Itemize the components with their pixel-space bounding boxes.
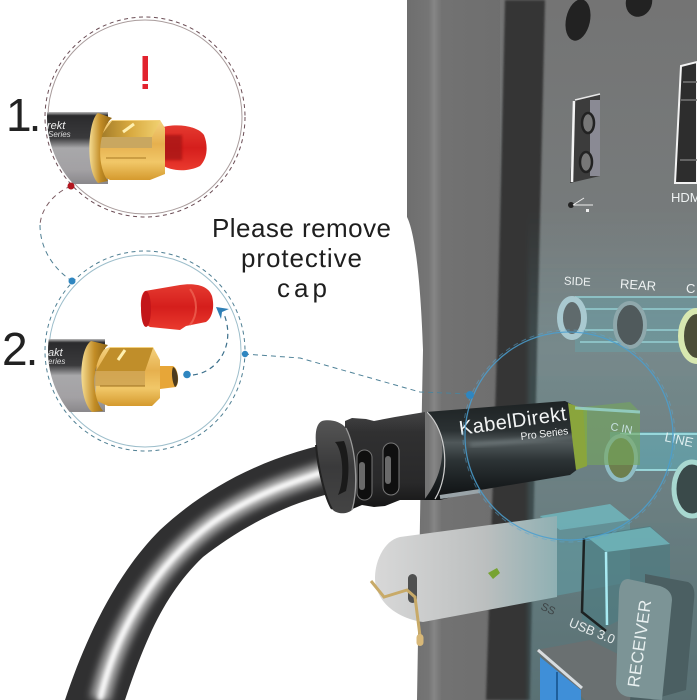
USB port xyxy=(570,94,600,183)
bare plug: eries xyxy=(48,357,65,366)
panel teal glow xyxy=(527,258,697,700)
instruction text: cap xyxy=(277,273,327,303)
brand text: KabelDirekt xyxy=(458,403,568,440)
exclamation mark xyxy=(142,56,148,89)
cable xyxy=(65,446,325,700)
port labels: SIDE xyxy=(564,275,591,289)
label 1: 1. xyxy=(6,89,38,141)
USB symbol xyxy=(568,198,593,212)
USB 3.0 label: SS xyxy=(539,601,557,618)
blue USB 3.0 sockets xyxy=(536,640,640,700)
strain relief slots xyxy=(357,443,399,500)
brand text: Pro Series xyxy=(520,425,569,443)
blue node on circle 2 right xyxy=(242,351,248,357)
zoom ring xyxy=(463,330,675,542)
leader end dot xyxy=(466,391,474,399)
curved arrow from plug to cap xyxy=(183,307,229,378)
receiver dongle: RECEIVER xyxy=(624,599,655,689)
USB 3.0 label: USB 3.0 xyxy=(567,615,617,647)
mounting holes xyxy=(566,0,652,41)
connecting dashed arc xyxy=(40,186,72,281)
device back panel xyxy=(400,0,700,700)
bare plug xyxy=(40,339,178,412)
instruction text xyxy=(212,213,391,303)
translucent plug tip: C IN xyxy=(609,421,633,437)
USB stick xyxy=(371,516,557,646)
circle 2 xyxy=(2,251,245,451)
strain relief front flange xyxy=(316,420,356,513)
glass audio jacks xyxy=(560,296,700,361)
circle 1 xyxy=(6,17,245,217)
cable collar shade xyxy=(335,441,348,495)
port labels: REAR xyxy=(620,276,657,294)
HDMI port xyxy=(675,62,697,183)
instruction text: Please remove xyxy=(212,213,391,243)
blue node on circle 2 xyxy=(68,278,76,284)
textured dark strip xyxy=(486,0,545,700)
stick lanyard xyxy=(371,581,420,636)
label 2: 2. xyxy=(2,323,36,375)
translucent USB blocks xyxy=(540,504,670,631)
USB 3.0 label xyxy=(541,603,615,644)
red node xyxy=(68,182,74,190)
red cap xyxy=(141,284,213,330)
stick LED xyxy=(488,568,500,579)
translucent plug tip xyxy=(568,402,640,470)
lower glass jacks xyxy=(606,429,700,516)
plug with red cap: Series xyxy=(48,130,71,139)
instruction text: protective xyxy=(241,243,362,273)
port labels: C xyxy=(686,281,695,296)
stick slot xyxy=(408,574,417,603)
plug with red cap: rekt xyxy=(47,120,66,132)
connector barrel xyxy=(424,401,587,500)
port labels xyxy=(564,190,700,296)
strain relief xyxy=(316,412,425,513)
plug with red cap xyxy=(40,112,207,184)
bare plug: akt xyxy=(48,347,64,359)
receiver dongle xyxy=(616,574,694,700)
dashed leader line xyxy=(244,354,470,394)
